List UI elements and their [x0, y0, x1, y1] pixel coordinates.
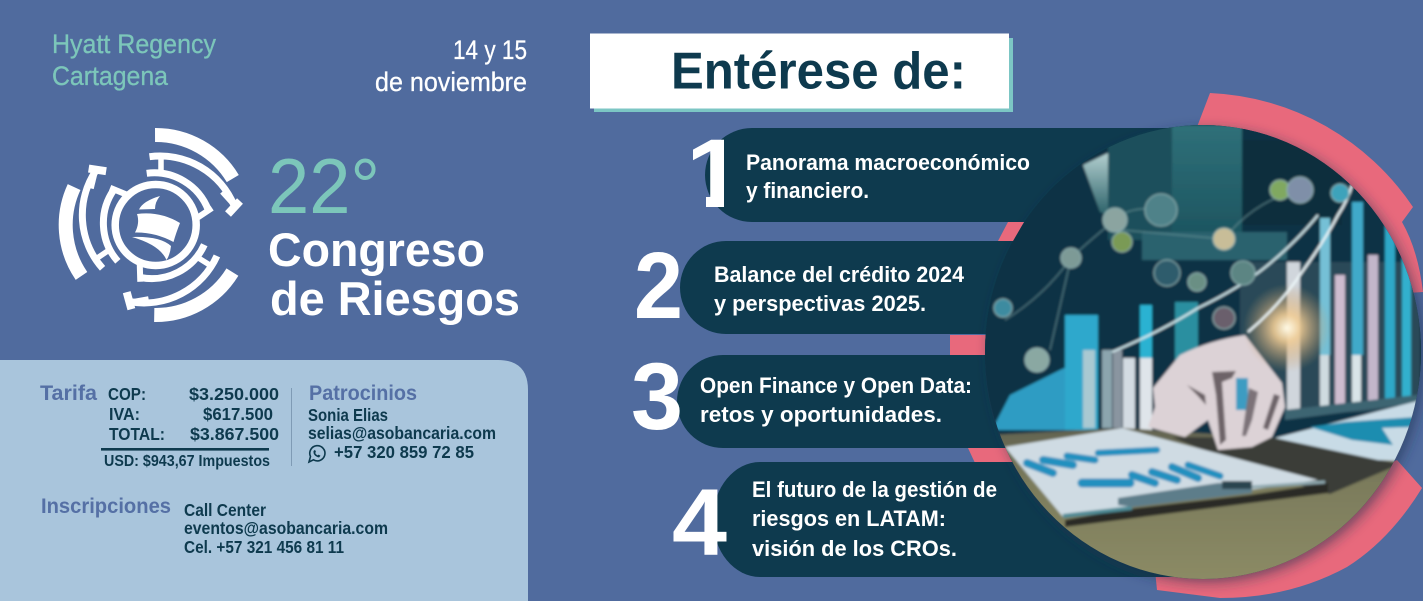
topic pill 4: 4 [672, 470, 727, 576]
glow [1243, 284, 1331, 372]
tarifa block: IVA: [109, 404, 140, 424]
topic pill 4 [672, 462, 1200, 577]
growth curves [1112, 215, 1318, 352]
topic pill 1: Panorama macroeconómico [746, 150, 1030, 175]
tarifa block: COP: [108, 384, 146, 404]
patrocinios block [308, 381, 496, 462]
heading box [590, 34, 1013, 112]
topic pill 3: Open Finance y Open Data: [700, 373, 972, 398]
date text: 14 y 15 [453, 35, 527, 65]
topic pill 4: El futuro de la gestión de [752, 477, 997, 502]
tarifa block: Tarifa [40, 381, 98, 405]
patrocinios block: +57 320 859 72 85 [334, 442, 474, 462]
topic pill 3 [631, 344, 1100, 450]
topic pill 1: 1 [683, 119, 748, 228]
clipboard [1065, 483, 1328, 527]
topic pill 4: riesgos en LATAM: [752, 506, 946, 531]
photo upper background [975, 120, 1423, 440]
congress title: de Riesgos [270, 272, 520, 325]
topic pill 1: y financiero. [746, 178, 869, 203]
tarifa block: $3.250.000 [189, 384, 279, 404]
data bubbles [994, 177, 1349, 372]
venue text [52, 29, 217, 91]
venue text: Cartagena [52, 61, 168, 91]
chart bars [992, 202, 1411, 430]
patrocinios block: selias@asobancaria.com [308, 423, 496, 443]
inscripciones block: Call Center [184, 500, 266, 520]
topic pill 1 [693, 128, 1167, 222]
date text [375, 35, 527, 97]
decorative pink arcs [950, 93, 1423, 598]
tarifa block: $3.867.500 [190, 424, 279, 444]
photo: hand over financial charts [975, 120, 1423, 590]
inscripciones block [41, 494, 388, 557]
right paper [1275, 399, 1423, 461]
main paper [1005, 428, 1318, 517]
congress title [268, 142, 520, 325]
tarifa block [40, 381, 279, 470]
inscripciones block: Cel. +57 321 456 81 11 [184, 537, 344, 557]
patrocinios block: Sonia Elias [308, 405, 388, 425]
tarifa block: $617.500 [203, 404, 273, 424]
topic pill 4: visión de los CROs. [752, 536, 957, 561]
congress title: Congreso [268, 223, 485, 276]
heading box: Entérese de: [671, 42, 966, 100]
icon: whatsapp [309, 446, 325, 462]
inscripciones block: Inscripciones [41, 494, 171, 518]
tarifa block: TOTAL: [109, 424, 165, 444]
pink accent between pills [998, 222, 1024, 241]
topic pill 2: Balance del crédito 2024 [714, 262, 964, 287]
topic pill 2 [634, 233, 1100, 339]
hand [1148, 335, 1285, 450]
icon: congress logo [31, 100, 281, 350]
panel: pricing and contacts [0, 360, 528, 601]
topic pill 3: 3 [631, 344, 683, 450]
dark band under bars [1285, 394, 1423, 420]
inscripciones block: eventos@asobancaria.com [184, 518, 388, 538]
topic pill 3: retos y oportunidades. [700, 402, 942, 427]
table [999, 425, 1395, 579]
tarifa block: USD: $943,67 Impuestos [104, 453, 270, 470]
venue text: Hyatt Regency [52, 29, 217, 59]
patrocinios block: Patrocinios [309, 381, 417, 405]
topic pill 2: 2 [634, 233, 683, 339]
topic pill 2: y perspectivas 2025. [714, 291, 926, 316]
date text: de noviembre [375, 67, 527, 97]
congress title: 22° [268, 142, 380, 230]
